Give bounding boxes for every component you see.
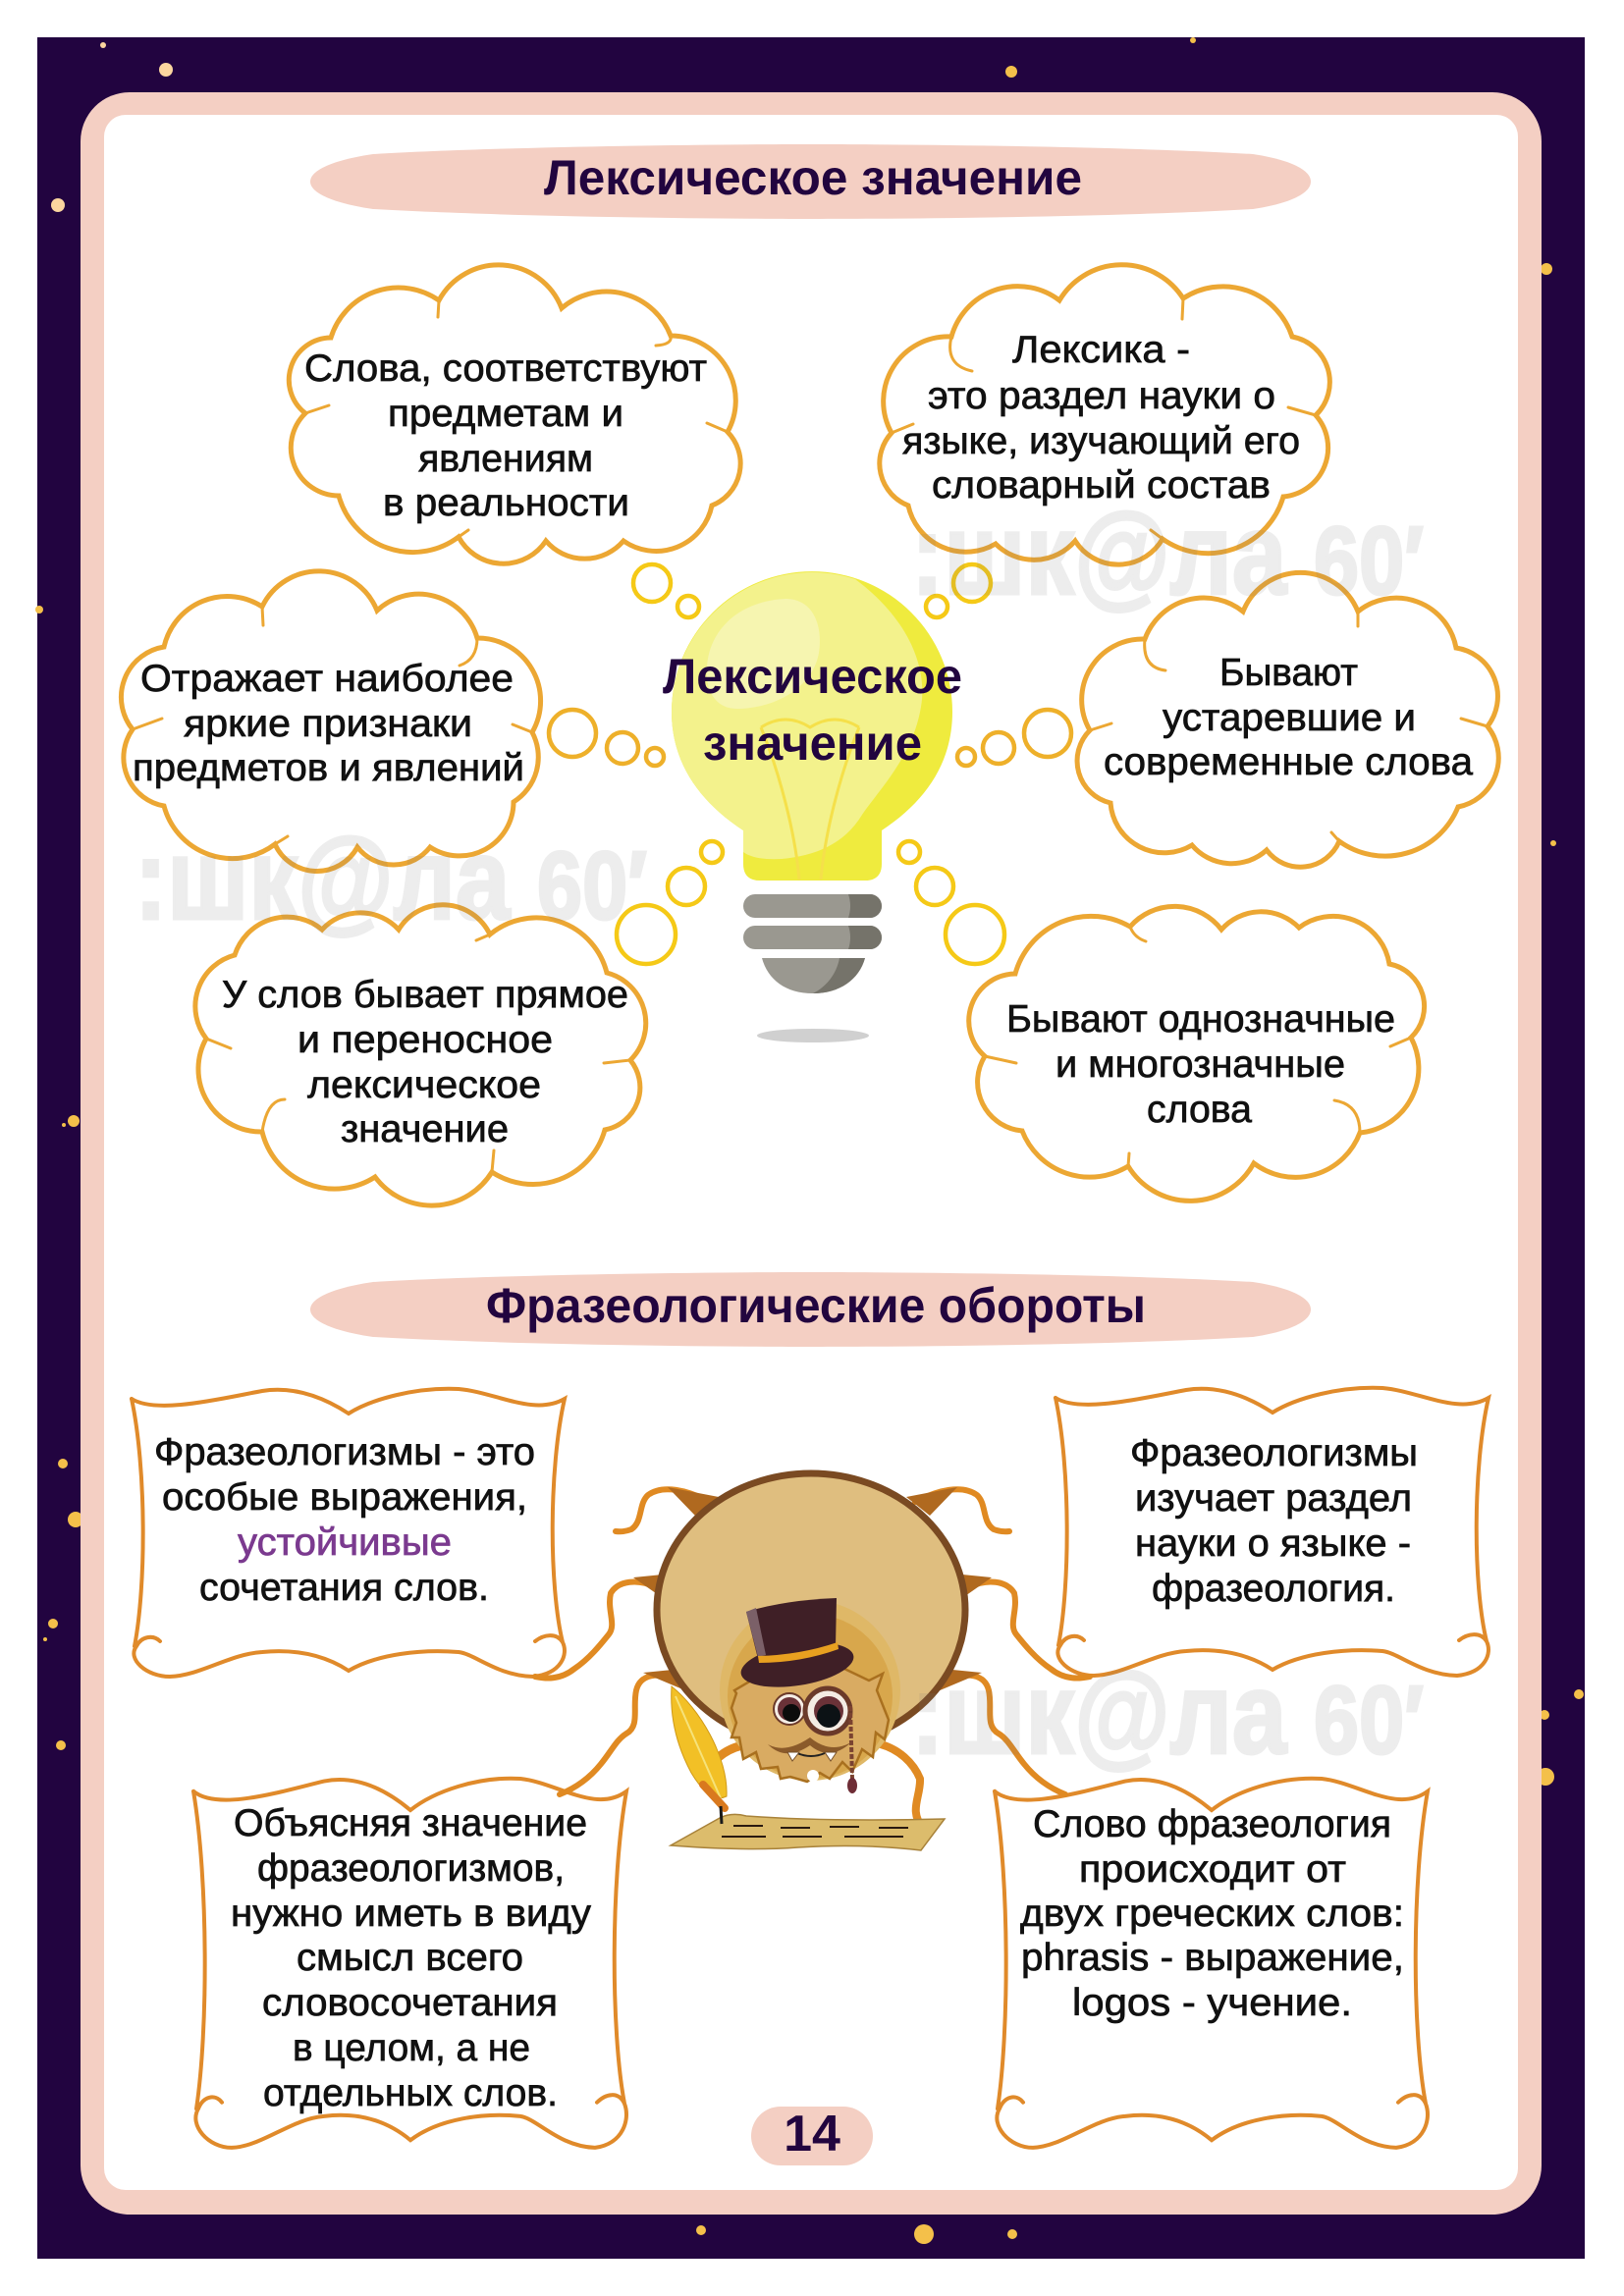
cloud: outdated and modern words: устаревшие и	[1163, 697, 1416, 739]
cloud: words correspond: предметам и	[388, 393, 623, 435]
cloud: words correspond	[289, 265, 740, 563]
spider head	[731, 1669, 889, 1782]
cloud: single and multiple meanings: слова	[1147, 1089, 1252, 1131]
scroll panel: phraseology as a branch: изучает раздел	[1135, 1477, 1412, 1520]
cloud: words correspond: явлениям	[418, 438, 593, 480]
paper with writing	[671, 1814, 945, 1850]
scroll panel: definition of idioms: устойчивые	[238, 1522, 452, 1564]
scroll panel: explaining idioms: отдельных слов.	[263, 2072, 558, 2114]
scroll panel: word origin: phrasis - выражение,	[1021, 1937, 1404, 1979]
cloud: outdated and modern words: Бывают	[1219, 652, 1358, 694]
scroll panel: definition of idioms: особые выражения,	[162, 1476, 527, 1519]
top hat	[737, 1598, 857, 1694]
page number: 14	[784, 2106, 840, 2163]
cloud: outdated and modern words	[1077, 572, 1498, 867]
cloud: outdated and modern words: современные слова	[1104, 741, 1473, 783]
icon: light bulb	[672, 571, 952, 1042]
watermark: upper right: :шк@ла 60′	[911, 490, 1424, 619]
scroll panel: explaining idioms: смысл всего	[297, 1937, 523, 1979]
heading: lexical meaning	[310, 144, 1311, 219]
scroll panel: explaining idioms: фразеологизмов,	[257, 1847, 565, 1890]
scroll panel: definition of idioms: Фразеологизмы - это	[154, 1431, 535, 1473]
cloud: brightest features: предметов и явлений	[133, 747, 524, 789]
scroll panel: definition of idioms	[132, 1389, 565, 1677]
scroll panel: word origin: происходит от	[1079, 1848, 1346, 1891]
cloud: brightest features: яркие признаки	[184, 703, 472, 745]
monocle chain	[847, 1706, 857, 1793]
watermark: middle left: :шк@ла 60′	[135, 815, 647, 944]
cloud: lexis definition: словарный состав	[932, 464, 1271, 507]
cloud: single and multiple meanings	[969, 906, 1425, 1201]
scroll panel: word origin: двух греческих слов:	[1020, 1893, 1404, 1935]
cloud: words correspond: в реальности	[383, 482, 629, 524]
scroll panel: definition of idioms: сочетания слов.	[199, 1567, 489, 1609]
head halo	[720, 1600, 900, 1781]
cloud: lexis definition	[880, 265, 1329, 564]
scroll panel: explaining idioms: в целом, а не	[293, 2027, 530, 2069]
cloud: brightest features	[121, 571, 541, 871]
heading: lexical meaning: Лексическое значение	[544, 150, 1082, 205]
cloud: single and multiple meanings: и многозначные	[1056, 1043, 1345, 1086]
scroll panel: explaining idioms	[193, 1779, 626, 2148]
watermark: lower right: :шк@ла 60′	[911, 1649, 1424, 1779]
scroll panel: phraseology as a branch: науки о языке -	[1135, 1522, 1411, 1565]
scroll panel: phraseology as a branch: фразеология.	[1152, 1568, 1395, 1610]
moustache and fangs	[768, 1737, 851, 1761]
monocle eye	[805, 1688, 850, 1734]
quill feather	[672, 1686, 727, 1824]
cloud: direct and figurative meaning: и переносное	[298, 1019, 553, 1061]
icon: spider in top hat writing with quill	[535, 1473, 1090, 1850]
scroll panel: explaining idioms: словосочетания	[262, 1982, 558, 2024]
white chin notch	[807, 1770, 819, 1782]
bulb label	[663, 649, 962, 771]
cloud: direct and figurative meaning: лексическое	[307, 1064, 541, 1106]
page number	[751, 2106, 873, 2165]
cloud: direct and figurative meaning	[195, 905, 646, 1205]
bulb label: Лексическое	[663, 649, 962, 704]
bulb label: значение	[703, 716, 922, 771]
page frame: white panel	[104, 115, 1518, 2190]
spider body	[657, 1473, 965, 1746]
scroll panel: word origin	[995, 1779, 1428, 2148]
thought bubbles	[549, 564, 1071, 964]
cloud: direct and figurative meaning: значение	[341, 1108, 509, 1150]
cloud: brightest features: Отражает наиболее	[140, 658, 514, 700]
scroll panel: phraseology as a branch: Фразеологизмы	[1130, 1432, 1418, 1474]
cloud: lexis definition: языке, изучающий его	[902, 420, 1300, 462]
scroll panel: explaining idioms: нужно иметь в виду	[231, 1893, 592, 1935]
cloud: direct and figurative meaning: У слов бывает прямое	[222, 974, 628, 1016]
scroll panel: phraseology as a branch	[1056, 1388, 1489, 1676]
heading: phraseological units	[310, 1272, 1311, 1347]
heading: phraseological units: Фразеологические обороты	[486, 1278, 1146, 1333]
left eye	[774, 1693, 805, 1725]
cloud: single and multiple meanings: Бывают однозначные	[1006, 998, 1395, 1041]
scroll panel: word origin: Слово фразеология	[1033, 1803, 1391, 1845]
spider legs	[535, 1487, 1090, 1828]
cloud: lexis definition: это раздел науки о	[928, 375, 1275, 417]
cloud: lexis definition: Лексика -	[1012, 329, 1190, 371]
scroll panel: word origin: logos - учение.	[1072, 1982, 1352, 2024]
cloud: words correspond: Слова, соответствуют	[304, 347, 707, 390]
scroll panel: explaining idioms: Объясняя значение	[234, 1802, 587, 1844]
